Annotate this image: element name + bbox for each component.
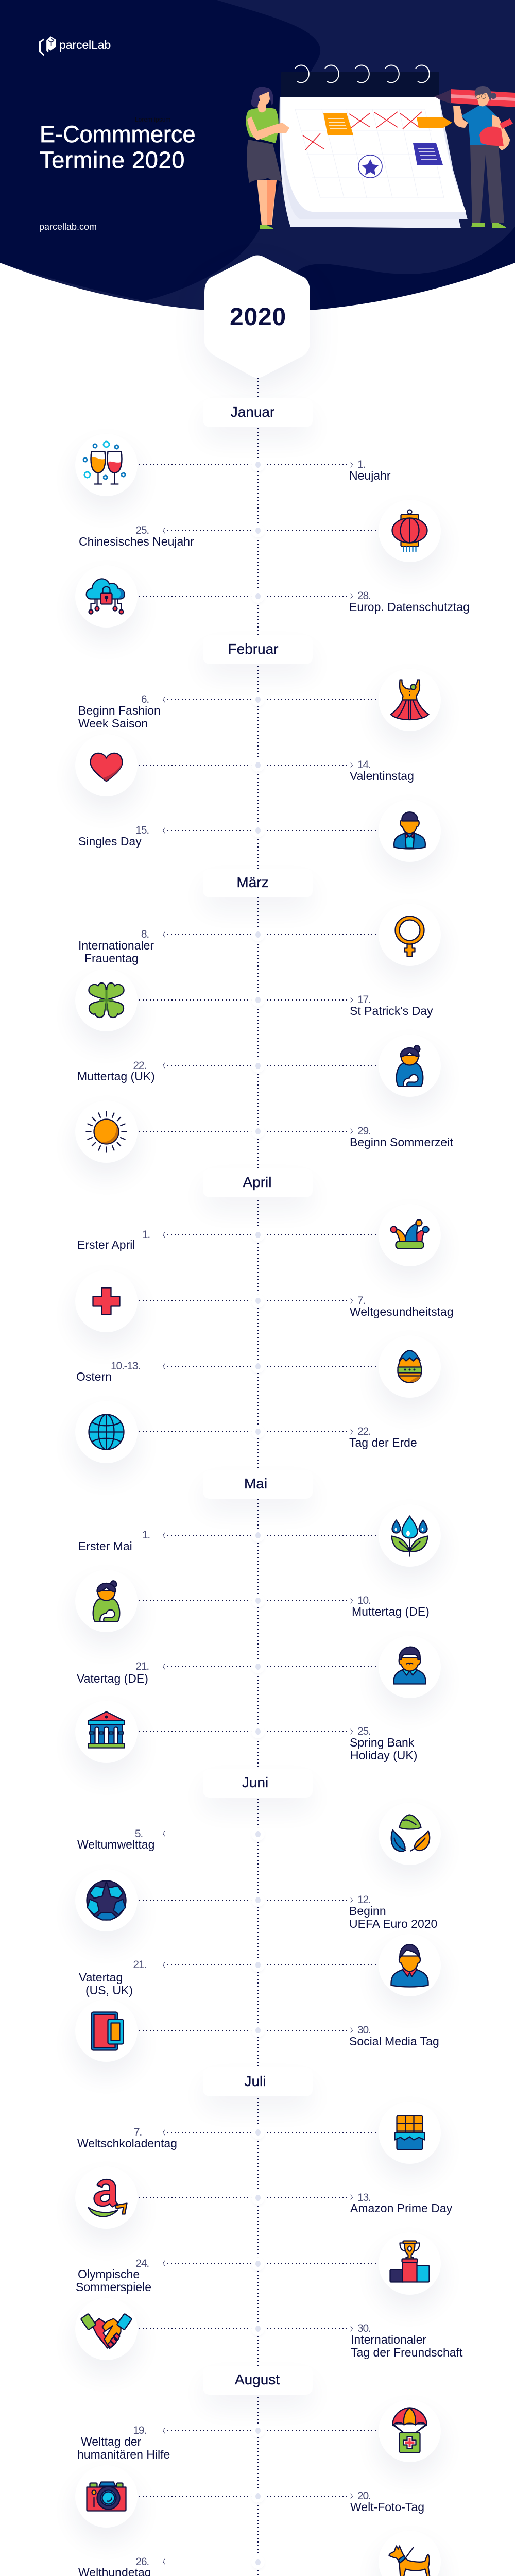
icon: father moustache [378,1635,441,1698]
date: 26. [135,2555,149,2568]
date: 6. [141,693,149,705]
stray placeholder text: Lorem ipsum [135,116,170,123]
event: Erster Mai [78,1515,439,2564]
icon: lantern [378,500,441,562]
date: 21. [133,1959,146,1971]
date: 10. [357,1595,371,1606]
name: UEFA Euro 2020 [349,1917,437,1930]
date: 21. [135,1660,149,1672]
name: Vatertag [79,1970,123,1984]
date: 25. [357,1725,371,1737]
date: 19. [133,2425,146,2436]
title: Termine 2020 [40,147,185,173]
event: Ostern [76,1350,439,2564]
month: April [205,1171,310,1195]
name [78,939,154,965]
name: Welttag der [81,2435,141,2448]
month: Januar [205,401,310,425]
name: Welt-Foto-Tag [350,2500,424,2513]
year badge 2020 [204,256,311,386]
icon: dog on leash [378,2531,441,2576]
icon: podium trophy [378,2232,441,2295]
month: Februar: Februar [228,641,279,657]
date: 25. [135,524,149,536]
logo: parcelLab header [39,36,111,56]
name: Chinesisches Neujahr [79,535,194,548]
event: Weltumwelttag [77,1814,439,2571]
name: Internationaler [351,2333,426,2346]
event: Neujahr [77,441,431,2564]
icon: plant and water drops [378,1504,441,1566]
date: 1. [142,1529,150,1541]
month: April: April [243,1174,272,1190]
event: Spring Bank Holiday (UK) [77,1711,431,2571]
name: Muttertag (UK) [77,1070,155,1083]
name: Weltschkoladentag [77,2136,177,2149]
name: humanitären Hilfe [77,2447,170,2461]
name: Olympische [78,2267,140,2281]
event: Amazon Prime Day [77,2178,452,2571]
date: 22. [357,1426,371,1437]
name: Beginn Sommerzeit [350,1136,453,1149]
icon: tablet and phone [75,1999,137,2062]
icon: heart [75,734,137,796]
illustration: calendar [280,65,468,228]
name: Neujahr [349,469,391,482]
name: Valentinstag [350,769,414,782]
date: 1. [142,1229,150,1241]
month: März: März [236,874,269,890]
icon: amazon logo [75,2166,137,2229]
date: 22. [133,1059,146,1072]
date: 28. [357,590,371,602]
event: Vatertag (US, UK) [79,1944,439,2571]
name [79,1970,133,1997]
month: Mai: Mai [244,1476,267,1492]
event: Beginn Sommerzeit [77,1111,453,2564]
icon: father with collar [378,1934,441,1996]
icon: cloud lock [75,565,137,628]
name [349,1904,437,1930]
icon: champagne glasses [75,434,137,496]
name: Spring Bank [350,1735,414,1749]
icon: jester hat [378,1204,441,1266]
date: 5. [135,1828,143,1839]
event: Weltgesundheitstag [77,1287,454,2564]
name: Social Media Tag [349,2034,439,2047]
month: August [205,2368,310,2392]
month: Juli: Juli [244,2073,266,2089]
icon: globe [75,1400,137,1463]
date: 20. [357,2490,371,2502]
event: Olympische Sommerspiele [76,2240,439,2571]
month: Mai [205,1472,310,1496]
website link: parcellab.com [39,222,97,232]
icon: aid parachute [378,2400,441,2462]
month: März [205,871,310,895]
header background [0,0,515,312]
date: 30. [357,2024,371,2036]
event: Chinesisches Neujahr [79,509,439,2564]
title: E-Commmerce [40,121,196,147]
name [350,1735,417,1762]
date: 17. [357,994,371,1006]
logo: parcelLab header: parcelLab [59,38,111,52]
name: Singles Day [78,835,142,848]
month: Januar: Januar [231,404,274,420]
month: August: August [235,2371,280,2387]
date: 24. [135,2258,149,2269]
event: Weltschkoladentag [77,2115,439,2571]
name: Holiday (UK) [350,1749,417,1762]
event: Welttag der humanitären Hilfe [77,2407,439,2571]
event: Welt-Foto-Tag [77,2481,424,2571]
date: 10.-13. [111,1360,140,1372]
name: Beginn Fashion [78,704,161,717]
name: (US, UK) [85,1984,133,1997]
date: 8. [141,928,149,940]
icon: bank [75,1700,137,1763]
month: Juli [205,2070,310,2094]
name: Erster April [77,1238,135,1251]
icon: red cross [75,1269,137,1332]
event: Muttertag (DE) [77,1580,431,2564]
name: Amazon Prime Day [350,2201,452,2215]
icon: camera [75,2465,137,2528]
date: 30. [357,2323,371,2334]
date: 12. [357,1894,371,1906]
month: Juni [205,1771,310,1795]
event: Welthundetag [0,2531,515,2576]
event: St Patrick's Day [77,982,433,2564]
event: Internationaler Tag der Freundschaft [77,2313,462,2571]
icon: sun [75,1100,137,1162]
name: Ostern [76,1369,112,1383]
icon: easter egg [378,1335,441,1397]
date: 29. [357,1125,371,1137]
name: Muttertag (DE) [352,1604,430,1618]
name: Weltgesundheitstag [350,1304,454,1318]
name: St Patrick's Day [350,1004,433,1017]
name: Sommerspiele [76,2280,151,2294]
event: Europ. Datenschutztag [77,578,470,2564]
illustration: right woman with marker [434,86,515,228]
event: Internationaler Frauentag [78,916,439,2564]
event: Social Media Tag [77,2011,439,2571]
icon: man [378,800,441,861]
icon: dress [378,669,441,731]
name [351,2333,462,2359]
event: Erster April [77,1219,439,2564]
name: Frauentag [84,951,139,964]
icon: football [75,1869,137,1931]
name: Weltumwelttag [77,1838,154,1851]
year badge 2020: 2020 [230,303,286,331]
illustration: left woman [246,87,289,229]
name: Week Saison [78,716,148,730]
name [76,2267,151,2294]
icon: mother green [75,1569,137,1632]
icon: clover [75,969,137,1031]
icon: recycling leaves [378,1803,441,1865]
name: Tag der Freundschaft [351,2345,462,2359]
event: Beginn UEFA Euro 2020 [77,1880,437,2571]
name: Europ. Datenschutztag [349,600,470,613]
icon: venus symbol [378,904,441,965]
header background and illustration [0,0,515,310]
event: Singles Day [78,811,439,2564]
title [40,121,196,173]
timeline vertical line [258,378,259,2576]
name: Erster Mai [78,1539,132,1553]
event: Muttertag (UK) [77,1045,439,2564]
name [78,704,161,730]
date: 7. [134,2126,142,2138]
icon: handshake [75,2298,137,2360]
name [77,2435,170,2461]
month: Februar [205,638,310,662]
date: 7. [357,1295,365,1307]
event: Vatertag (DE) [77,1647,439,2564]
name: Internationaler [78,939,154,952]
event: Valentinstag [77,752,431,2564]
date: 1. [357,459,365,470]
icon: chocolate bar [378,2101,441,2164]
event: Tag der Erde [77,1414,431,2564]
name: Vatertag (DE) [77,1671,148,1685]
icon: mother blue [378,1035,441,1097]
month: Juni: Juni [242,1774,268,1790]
event: Beginn Fashion Week Saison [78,679,439,2564]
date: 15. [135,824,149,836]
name: Tag der Erde [349,1435,417,1449]
name: Beginn [349,1904,386,1918]
date: 13. [357,2192,371,2203]
date: 14. [357,759,371,771]
